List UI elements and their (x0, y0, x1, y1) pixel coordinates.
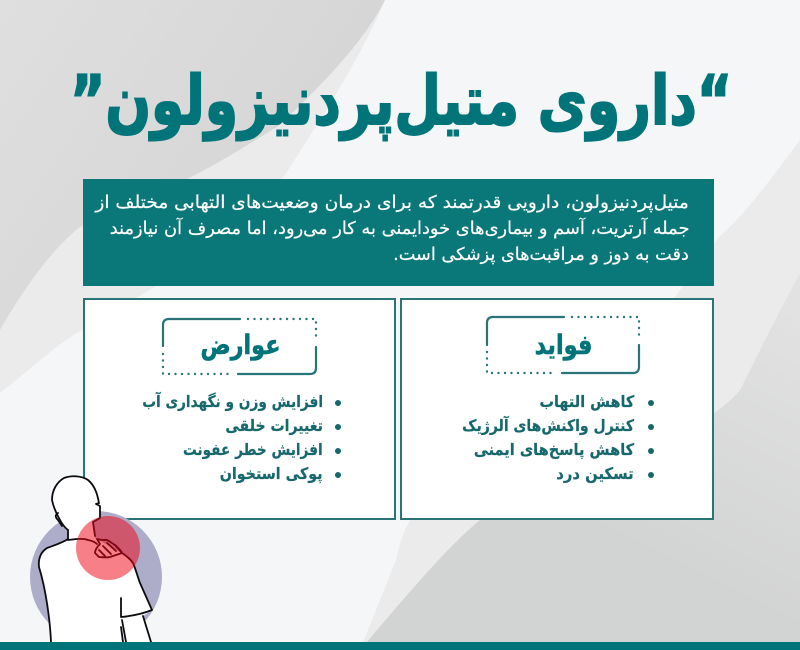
intro panel (83, 179, 714, 286)
body (39, 476, 152, 642)
illustration: person holding neck (30, 475, 162, 642)
intro panel: جمله آرتریت، آسم و بیماری‌های خودایمنی به کار می‌رود، اما مصرف آن نیازمند (109, 219, 689, 239)
heading: side effects: عوارض (200, 330, 281, 361)
panel: benefits (400, 298, 714, 520)
title: “داروی متیل‌پردنیزولون” (70, 62, 732, 141)
outline (39, 476, 152, 642)
bottom bar (0, 642, 800, 650)
list: side effects: افزایش وزن و نگهداری آب (142, 392, 323, 411)
list: benefits: کاهش پاسخ‌های ایمنی (474, 440, 634, 459)
heading: benefits: فواید (535, 330, 592, 361)
frame: side effects (163, 319, 316, 374)
panel: side effects (83, 298, 396, 520)
list: benefits: تسکین درد (557, 464, 634, 483)
list: benefits: کاهش التهاب (539, 392, 634, 411)
list: side effects (142, 392, 341, 484)
background circle (30, 511, 162, 643)
intro panel: متیل‌پردنیزولون، دارویی قدرتمند که برای درمان وضعیت‌های التهابی مختلف از (96, 193, 689, 213)
pain circle (76, 516, 140, 580)
frame: benefits (487, 317, 639, 373)
list: benefits: کنترل واکنش‌های آلرژیک (462, 416, 634, 435)
intro panel: دقت به دوز و مراقبت‌های پزشکی است. (393, 245, 689, 265)
list: side effects: افزایش خطر عفونت (183, 440, 323, 459)
list: side effects: تغییرات خلقی (225, 416, 323, 435)
list: benefits (462, 392, 654, 484)
list: side effects: پوکی استخوان (220, 464, 323, 483)
